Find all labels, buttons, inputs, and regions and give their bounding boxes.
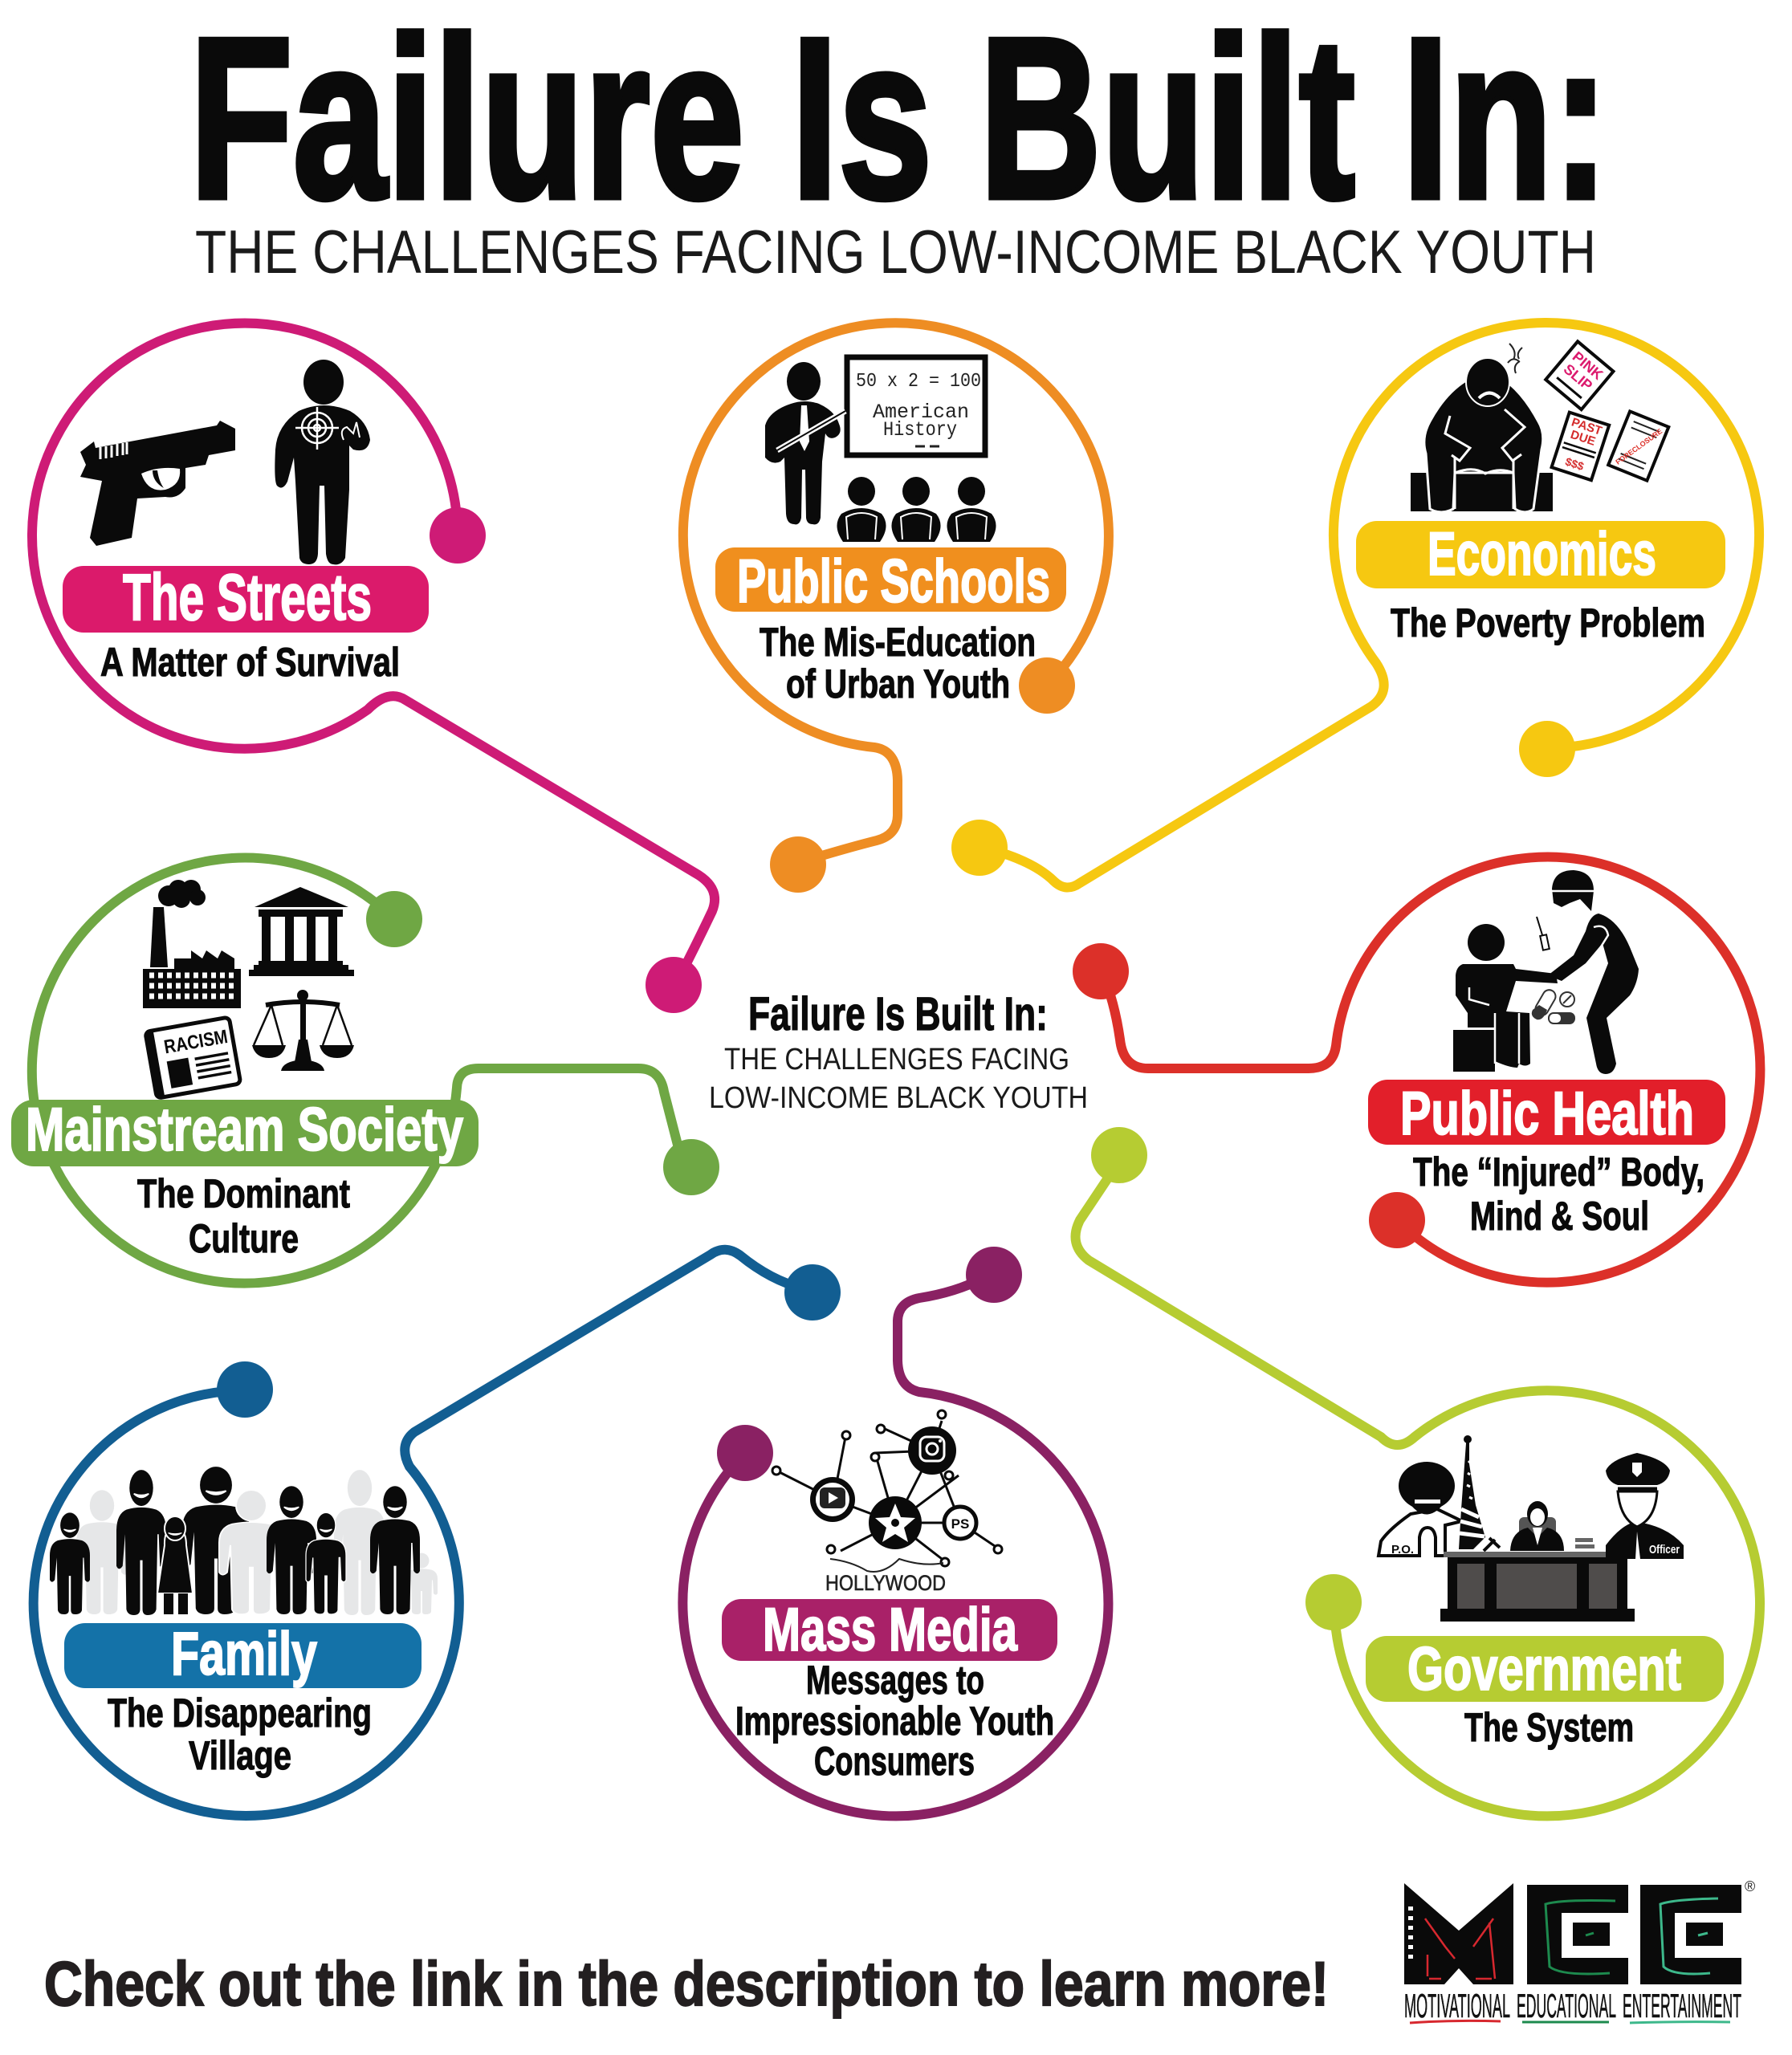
icon: stressed seated person — [1411, 344, 1553, 512]
icon: person with target — [275, 360, 370, 564]
icon: social media network — [772, 1410, 1002, 1566]
logo underlines — [1410, 2020, 1730, 2023]
subhead: The Disappearing Village — [108, 1691, 372, 1778]
panel: The Streets — [32, 324, 715, 1013]
logo letter E — [1527, 1885, 1628, 1984]
icon: patient on box — [1453, 924, 1558, 1072]
subhead: The Disappearing Village: Village — [189, 1733, 291, 1778]
icon: teacher at blackboard: American — [873, 401, 969, 424]
subhead: A Matter of Survival: A Matter of Survival — [100, 640, 400, 685]
icon: bills: SLIP — [1561, 361, 1595, 394]
banner: Public Schools: Public Schools — [737, 547, 1050, 616]
icon: police officer: Officer — [1649, 1543, 1680, 1557]
ring and connector: Family — [34, 1250, 841, 1816]
banner: Public Health: Public Health — [1400, 1080, 1694, 1148]
center subheading: LOW-INCOME BLACK YOUTH — [709, 1081, 1088, 1115]
banner: Government: Government — [1407, 1635, 1681, 1703]
center subheading — [709, 1043, 1088, 1115]
icon: Hollywood sign — [825, 1559, 946, 1595]
logo: MEE — [1404, 1878, 1755, 2024]
panel: center caption — [709, 988, 1088, 1115]
subhead: The Dominant Culture: The Dominant — [137, 1171, 350, 1216]
ring and connector: Mainstream Society — [32, 858, 719, 1284]
center heading: Failure Is Built In: — [748, 988, 1048, 1040]
subhead: The Injured Body, Mind and Soul: The “Injured” Body, — [1413, 1150, 1704, 1194]
panel: Public Schools — [683, 323, 1109, 893]
icon: handgun — [80, 421, 235, 546]
subhead: The Disappearing Village: The Disappearing — [108, 1691, 372, 1736]
logo letter M — [1404, 1883, 1513, 1984]
icon: bills: PAST — [1570, 416, 1603, 438]
icon: American flag — [1459, 1435, 1485, 1549]
icon: Hollywood sign: HOLLYWOOD — [825, 1571, 946, 1595]
subhead: The Dominant Culture — [137, 1171, 350, 1261]
icon: pills — [1532, 987, 1575, 1024]
panel: Mainstream Society — [11, 858, 719, 1284]
icon: teacher at blackboard: History — [883, 418, 957, 442]
banner: Mass Media: Mass Media — [763, 1596, 1018, 1664]
icon: social media network: PS — [951, 1516, 969, 1532]
subhead: The Mis-Education of Urban Youth — [760, 620, 1036, 706]
icon: bills: FORECLOSURE — [1614, 427, 1664, 466]
subhead: The System: The System — [1464, 1705, 1634, 1750]
subhead: The Dominant Culture: Culture — [189, 1216, 299, 1261]
icon: probation officer: P.O. — [1391, 1543, 1414, 1557]
panel: Government — [1076, 1127, 1760, 1816]
subhead: The Poverty Problem: The Poverty Problem — [1391, 600, 1705, 645]
panel: Public Health — [1073, 857, 1760, 1283]
footer call to action: Check out the link in the description to learn more! — [44, 1948, 1329, 2019]
banner: Economics: Economics — [1427, 520, 1656, 588]
subhead: Messages to Impressionable Youth Consumers: Consumers — [814, 1739, 975, 1784]
icon: bills: $$$ — [1564, 455, 1586, 473]
panel: Mass Media — [682, 1247, 1108, 1816]
banner: Mainstream Society: Mainstream Society — [26, 1096, 463, 1164]
icon: scales of justice — [252, 990, 354, 1071]
icon: bills — [1546, 341, 1668, 481]
icon: judge at bench — [1440, 1501, 1635, 1622]
ring and connector: Public Schools — [683, 323, 1109, 893]
ring and connector: Economics — [951, 323, 1759, 888]
subhead: The Injured Body, Mind and Soul: Mind & Soul — [1470, 1194, 1649, 1239]
icon: courthouse — [249, 887, 354, 976]
icon: family group — [50, 1467, 438, 1615]
registered mark: ® — [1745, 1878, 1755, 1894]
banner: Family: Family — [171, 1620, 317, 1688]
icon: probation officer — [1379, 1462, 1462, 1557]
subhead: The Mis-Education of Urban Youth: of Urban Youth — [786, 661, 1010, 706]
subhead: The Mis-Education of Urban Youth: The Mis-Education — [760, 620, 1036, 665]
icon: teacher at blackboard: 50 x 2 = 100 — [856, 371, 981, 393]
ring and connector: The Streets — [32, 324, 715, 1013]
ring and connector: Public Health — [1073, 857, 1760, 1283]
logo wordmark: MOTIVATIONAL — [1404, 1987, 1510, 2024]
subhead: The Injured Body, Mind and Soul — [1413, 1150, 1704, 1239]
icon: police officer — [1606, 1453, 1684, 1559]
panel: Family — [34, 1250, 841, 1816]
panel: Economics — [951, 323, 1759, 888]
icon: doctor with syringe — [1537, 870, 1639, 1074]
icon: racism newspaper: RACISM — [162, 1026, 230, 1058]
logo wordmark: EDUCATIONAL — [1517, 1987, 1616, 2024]
subhead: Messages to Impressionable Youth Consumers: Messages to — [806, 1658, 984, 1703]
ring and connector: Mass Media — [682, 1247, 1108, 1816]
ring and connector: Government — [1076, 1127, 1760, 1816]
banner: The Streets: The Streets — [123, 561, 372, 634]
icon: bills: DUE — [1569, 428, 1597, 449]
icon: factory — [143, 880, 241, 1008]
banner: Family — [64, 1620, 422, 1688]
icon: bills: PINK — [1570, 348, 1607, 383]
subhead: Messages to Impressionable Youth Consumers — [735, 1658, 1054, 1784]
icon: teacher at blackboard — [765, 357, 988, 524]
center subheading: THE CHALLENGES FACING — [724, 1043, 1069, 1076]
icon: three students — [837, 477, 996, 542]
icon: racism newspaper — [145, 1017, 241, 1098]
subhead: Messages to Impressionable Youth Consumers: Impressionable Youth — [735, 1699, 1054, 1744]
logo letter E — [1640, 1885, 1741, 1984]
